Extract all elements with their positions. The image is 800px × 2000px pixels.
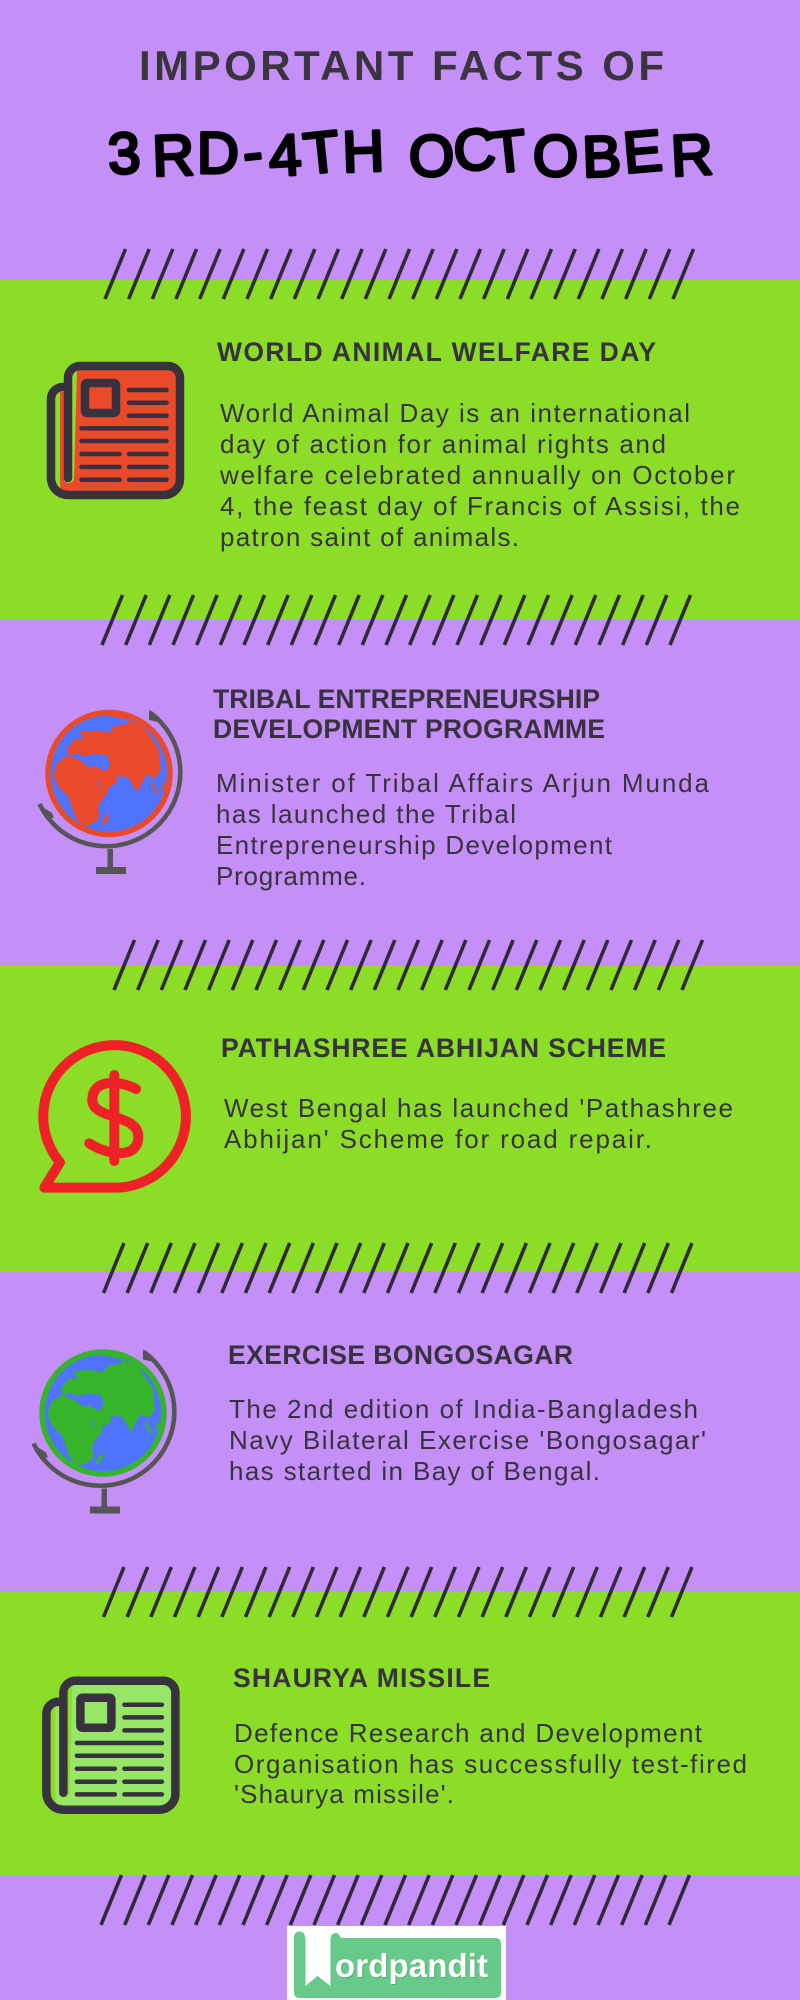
icon: globe green (32, 1350, 174, 1514)
body text: has launched the Tribal (216, 799, 516, 829)
panel: title header (106, 42, 715, 190)
body text (229, 1394, 706, 1486)
heading: SHAURYA MISSILE (233, 1663, 490, 1693)
icon: newspaper red (51, 366, 180, 495)
body text (224, 1093, 733, 1154)
logo text: ordpandit (335, 1947, 488, 1984)
body text: Abhijan' Scheme for road repair. (224, 1124, 652, 1154)
body text: patron saint of animals. (220, 522, 519, 552)
panel: world animal welfare day (0, 280, 800, 620)
body text: The 2nd edition of India-Bangladesh (229, 1394, 698, 1424)
body text (234, 1718, 747, 1809)
heading: WORLD ANIMAL WELFARE DAY (217, 337, 656, 367)
heading: EXERCISE BONGOSAGAR (228, 1340, 573, 1370)
heading: DEVELOPMENT PROGRAMME (213, 714, 605, 744)
icon: globe red (38, 710, 180, 874)
logo: wordpandit (287, 1926, 506, 2000)
heading: TRIBAL ENTREPRENEURSHIP (213, 684, 600, 714)
heading: PATHASHREE ABHIJAN SCHEME (221, 1033, 666, 1063)
body text: Programme. (216, 861, 366, 891)
body text: World Animal Day is an international (220, 398, 690, 428)
body text (216, 768, 710, 891)
panel: shaurya missile (0, 1591, 800, 1876)
body text: 4, the feast day of Francis of Assisi, the (220, 491, 740, 521)
body text: West Bengal has launched 'Pathashree (224, 1093, 733, 1123)
panel: pathashree abhijan scheme (0, 966, 800, 1271)
body text: has started in Bay of Bengal. (229, 1456, 600, 1486)
title: important facts of: IMPORTANT FACTS OF (139, 42, 664, 89)
panel: exercise bongosagar (0, 1271, 800, 1591)
body text: welfare celebrated annually on October (219, 460, 735, 490)
body text: Entrepreneurship Development (216, 830, 613, 860)
body text: 'Shaurya missile'. (234, 1779, 454, 1809)
body text (219, 398, 740, 552)
body text: Minister of Tribal Affairs Arjun Munda (216, 768, 710, 798)
icon: newspaper green (46, 1681, 175, 1810)
heading (213, 684, 605, 744)
body text: Organisation has successfully test-fired (234, 1749, 747, 1779)
body text: day of action for animal rights and (220, 429, 666, 459)
body text: Defence Research and Development (234, 1718, 703, 1748)
body text: Navy Bilateral Exercise 'Bongosagar' (229, 1425, 706, 1455)
panel: tribal entrepreneurship development programme (0, 620, 800, 966)
title: date: 3RD-4TH OCTOBER (106, 116, 715, 190)
icon: dollar speech bubble (43, 1045, 186, 1188)
